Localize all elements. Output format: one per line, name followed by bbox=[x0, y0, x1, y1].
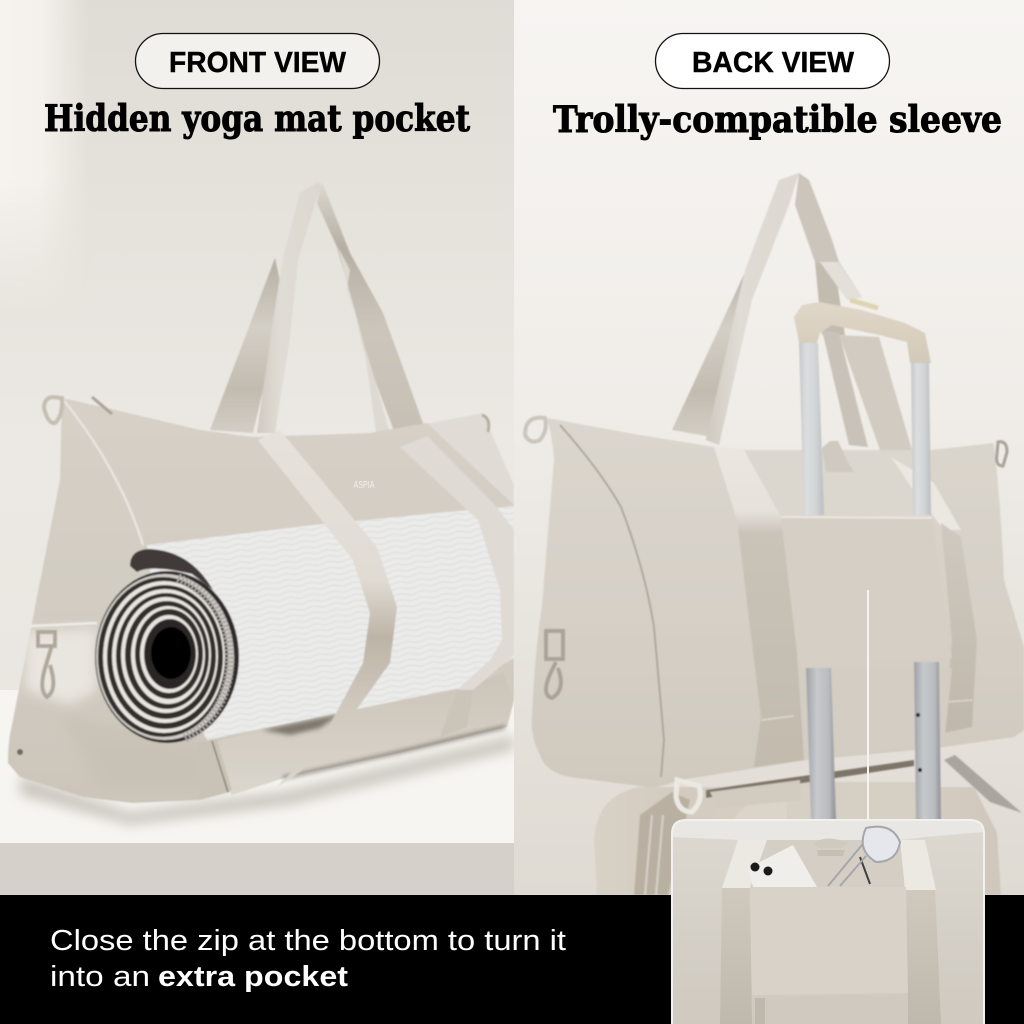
far wing of the bag bbox=[425, 413, 514, 560]
light strand bbox=[257, 182, 322, 433]
suitcase bbox=[594, 760, 1001, 895]
lower strap loop bbox=[442, 722, 466, 735]
top zip pull bbox=[92, 397, 112, 414]
right buckle bbox=[482, 415, 489, 432]
d-ring bbox=[676, 780, 700, 812]
brand logo: ASPIA bbox=[354, 480, 375, 491]
right strand bbox=[317, 184, 424, 430]
strap over the mat bbox=[258, 430, 397, 787]
back handle bbox=[672, 173, 912, 450]
light strand bbox=[706, 173, 799, 445]
right strap over the mat bbox=[400, 436, 514, 690]
caption: extra pocket bbox=[158, 961, 348, 993]
right strand upper bbox=[795, 173, 862, 300]
inset photo: rear pocket holding phone and glasses bbox=[672, 820, 984, 1024]
side carabiner bbox=[38, 632, 55, 697]
rivet bbox=[17, 749, 23, 755]
yoga mat body bbox=[147, 506, 514, 740]
side highlight bbox=[25, 628, 97, 705]
left vertical strap band bbox=[714, 447, 804, 767]
trolley handle bbox=[794, 302, 931, 363]
inset bag bbox=[672, 832, 984, 1024]
strand behind trolley bbox=[815, 262, 845, 335]
side panel seam bbox=[560, 425, 664, 777]
mat flap bbox=[130, 549, 213, 590]
inset top loop bbox=[813, 838, 847, 848]
left dark strand bbox=[210, 258, 284, 433]
bag bottom dark line bbox=[283, 727, 505, 778]
centre upper bag bbox=[744, 450, 931, 520]
top right ring bbox=[997, 442, 1007, 466]
pill: front view bbox=[136, 34, 380, 88]
suitcase zipper bbox=[634, 792, 690, 895]
heading: front view: Hidden yoga mat pocket bbox=[44, 98, 470, 140]
lower shade bbox=[60, 715, 210, 790]
bag shadow bbox=[20, 735, 514, 825]
shoulder ring bbox=[44, 397, 62, 423]
bag body bbox=[532, 418, 1024, 787]
lower pocket bbox=[800, 668, 952, 760]
sleeve pocket bbox=[781, 517, 952, 668]
panel: back view bag with trolley bbox=[525, 173, 1024, 895]
panel: back view background bbox=[514, 0, 1024, 895]
phone bbox=[748, 845, 817, 887]
pill: back view: BACK VIEW bbox=[692, 47, 854, 79]
right strap highlight bbox=[891, 457, 961, 530]
caption bbox=[50, 925, 566, 993]
inset lower zip bbox=[753, 995, 908, 1024]
pill: back view bbox=[656, 34, 890, 88]
bottom pocket seam bbox=[200, 741, 232, 791]
table top bbox=[0, 690, 514, 843]
lower strands bbox=[822, 330, 868, 447]
glasses bbox=[828, 827, 900, 886]
inner thin strand bbox=[338, 247, 390, 433]
panel: front view background bbox=[0, 0, 514, 895]
inset centre bbox=[750, 840, 905, 888]
tray clasp bbox=[710, 780, 800, 808]
ribbed rim bbox=[178, 578, 230, 738]
inset straps bbox=[720, 887, 752, 1024]
right strap stitching bbox=[946, 700, 972, 702]
lower bag section bbox=[220, 742, 414, 795]
inset border bbox=[672, 820, 984, 1024]
twist bbox=[820, 262, 862, 300]
table front edge bbox=[0, 843, 514, 895]
top left ring bbox=[525, 418, 546, 442]
trolley lower poles bbox=[806, 662, 941, 820]
suitcase dome bbox=[732, 798, 816, 862]
side clip bbox=[546, 631, 563, 698]
luggage tag bbox=[944, 755, 1022, 813]
caption: Close the zip at the bottom to turn it bbox=[50, 925, 566, 957]
inset backdrop bbox=[672, 820, 984, 1024]
caption: into an bbox=[50, 961, 150, 993]
left strap stitching bbox=[762, 716, 794, 720]
handle button bbox=[850, 300, 878, 308]
inset pocket bbox=[750, 887, 908, 995]
dark slits bbox=[706, 760, 914, 798]
mat end spiral bbox=[95, 571, 239, 743]
window light bbox=[0, 0, 72, 254]
under-mat shadow bbox=[262, 714, 340, 735]
zipper bbox=[30, 623, 97, 626]
bag main body bbox=[8, 398, 514, 803]
suitcase tray bbox=[800, 782, 916, 787]
right vertical strap band bbox=[941, 523, 977, 733]
top loop bbox=[822, 441, 854, 472]
panel: bottom black band bbox=[0, 895, 1024, 1024]
panel: front view bag with yoga mat bbox=[8, 182, 514, 825]
pointer line bbox=[867, 590, 869, 822]
pill: front view: FRONT VIEW bbox=[169, 47, 346, 79]
top seam bbox=[62, 398, 143, 545]
trolley upper poles bbox=[799, 343, 931, 515]
front handle bbox=[210, 182, 430, 447]
left strand bbox=[672, 257, 760, 437]
